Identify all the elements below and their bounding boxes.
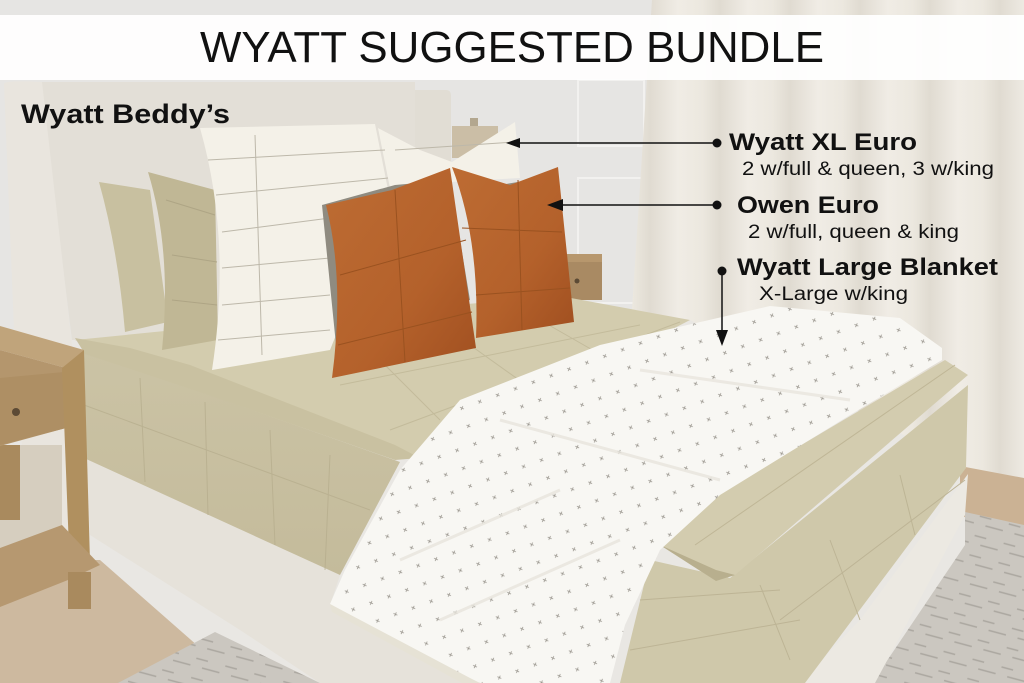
callout: Wyatt XL Euro: Wyatt XL Euro (729, 129, 917, 156)
far nightstand (560, 254, 602, 300)
lamp (452, 118, 498, 158)
white large blanket (330, 306, 942, 683)
wall background (0, 0, 660, 340)
grey pillow backs (322, 180, 540, 345)
back khaki euro pillows (99, 172, 218, 350)
headboard (4, 81, 451, 535)
wall panel moulding (578, 80, 644, 303)
callout: Wyatt Large Blanket: X-Large w/king (759, 284, 908, 305)
callout: Owen Euro: Owen Euro (737, 192, 879, 219)
callout: Wyatt XL Euro (506, 129, 994, 180)
floor (0, 466, 1024, 683)
quilt flap, right (660, 360, 968, 581)
title band: WYATT SUGGESTED BUNDLE (200, 23, 824, 72)
callout: Wyatt XL Euro: 2 w/full & queen, 3 w/king (742, 159, 994, 180)
rug (118, 512, 1024, 683)
near nightstand (0, 326, 100, 609)
quilt side, left (82, 350, 400, 575)
callout: Owen Euro: 2 w/full, queen & king (748, 222, 959, 243)
brand heading: Wyatt Beddy’s (21, 99, 230, 129)
callout: Wyatt Large Blanket (716, 254, 998, 346)
quilt top (75, 296, 690, 460)
callout: Wyatt Large Blanket: Wyatt Large Blanket (737, 254, 998, 281)
bed base (85, 458, 968, 683)
white striped Wyatt XL Euro pillows (200, 122, 520, 370)
curtains (632, 0, 1024, 478)
leather Owen Euro pillows (326, 167, 574, 378)
callout: Owen Euro (547, 192, 959, 243)
quilt side, right (620, 385, 968, 683)
title band (0, 15, 1024, 80)
